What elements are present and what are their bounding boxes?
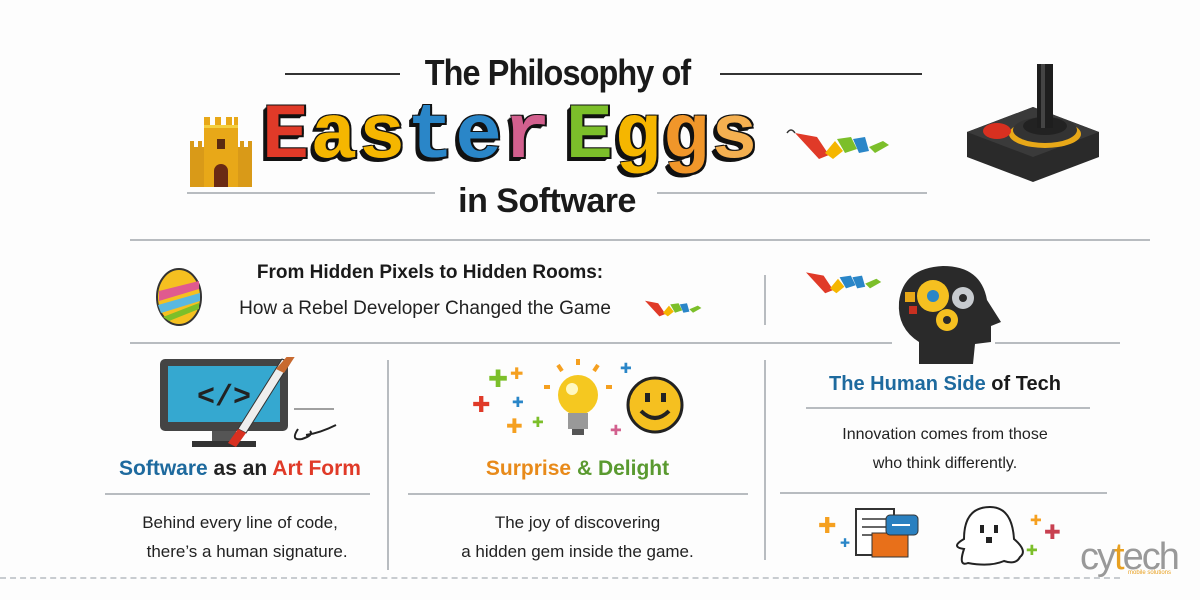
panel: human side: [780, 373, 1107, 566]
body text: The joy of discovering: [495, 513, 660, 532]
body text: there’s a human signature.: [147, 542, 348, 561]
icon: small ribbon: [645, 300, 702, 316]
body text: [142, 513, 348, 561]
icon: bulb sparkles smiley: [472, 359, 684, 438]
icon: castle: [190, 117, 252, 187]
body text: Behind every line of code,: [142, 513, 338, 532]
icon: head with gears: [898, 266, 1001, 364]
icon: joystick: [967, 64, 1099, 182]
logo: cytech: cytech: [1080, 536, 1178, 578]
icons: chat and ghost: ✚: [1044, 522, 1061, 544]
body text: who think differently.: [873, 455, 1017, 472]
subtitle text: How a Rebel Developer Changed the Game: [239, 298, 611, 319]
subtitle text: From Hidden Pixels to Hidden Rooms:: [257, 262, 603, 283]
icon: bulb sparkles smiley: ✚: [506, 416, 523, 438]
icon: monitor with brush: </>: [197, 381, 251, 415]
subtitle text: [239, 262, 611, 319]
icon: bulb sparkles smiley: ✚: [620, 360, 632, 376]
icons: chat and ghost: ✚: [818, 513, 836, 538]
panel: surprise: [408, 359, 748, 561]
body text: Innovation comes from those: [842, 426, 1048, 443]
icon: bulb sparkles smiley: ✚: [488, 366, 508, 393]
logo: cytech: mobile solutions: [1128, 570, 1171, 576]
icon: ribbon right: [806, 272, 882, 294]
icon: egg: [156, 268, 202, 326]
heading: The Human Side of Tech: [829, 373, 1061, 395]
icons: chat and ghost: ✚: [1026, 542, 1038, 558]
icon: bulb sparkles smiley: ✚: [510, 366, 523, 383]
icon: bulb sparkles smiley: ✚: [532, 414, 544, 430]
heading: Software as an Art Form: [119, 457, 361, 480]
icons: chat and ghost: [818, 506, 1061, 566]
heading: Surprise & Delight: [486, 457, 669, 480]
body text: a hidden gem inside the game.: [461, 542, 694, 561]
icon: bulb sparkles smiley: ✚: [610, 422, 622, 438]
icon: bulb sparkles smiley: ✚: [512, 394, 524, 410]
icon: ribbon: [786, 129, 889, 159]
icon: monitor with brush: [160, 357, 336, 447]
icon: bulb sparkles smiley: ✚: [472, 392, 490, 417]
title: Easter Eggs: EasterEggs: [262, 93, 759, 181]
icons: chat and ghost: ✚: [840, 536, 850, 550]
body text: [842, 426, 1048, 472]
title line 3: in Software: [458, 182, 636, 220]
icons: chat and ghost: ✚: [1030, 512, 1042, 528]
title line 1: The Philosophy of: [425, 52, 690, 93]
body text: [461, 513, 694, 561]
panel: art form: [105, 357, 370, 561]
